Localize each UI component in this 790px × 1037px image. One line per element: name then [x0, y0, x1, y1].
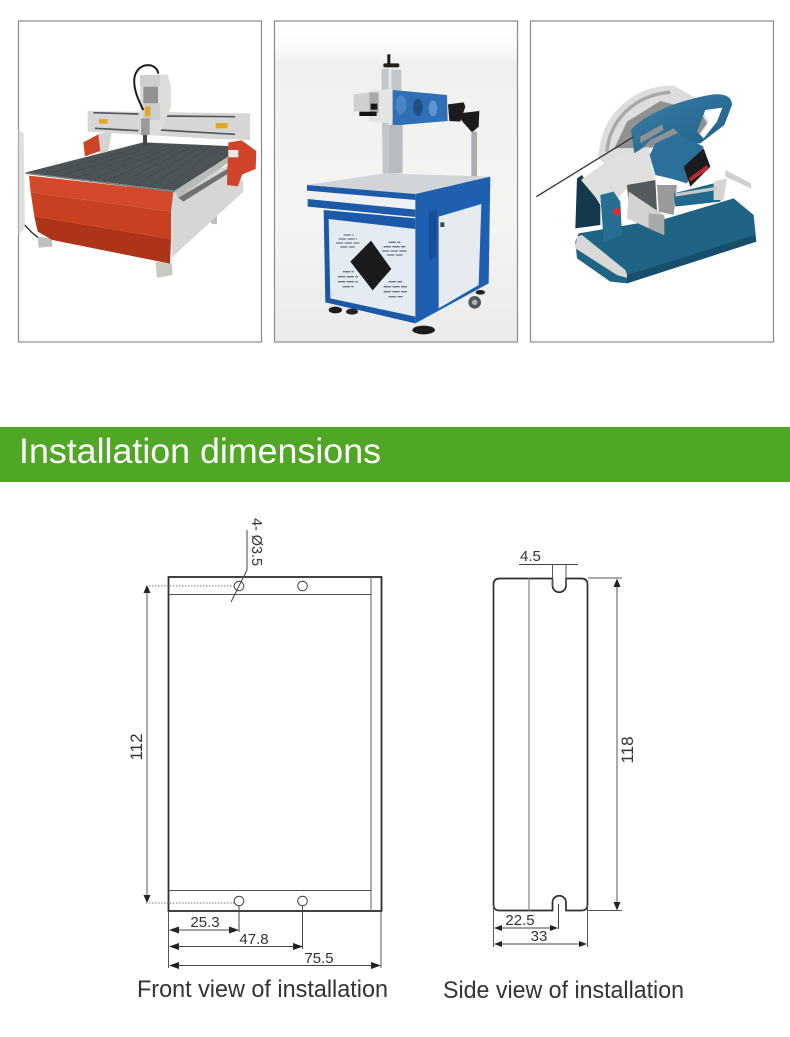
dimension 33 [494, 905, 588, 947]
diagram: front view of installation [127, 518, 388, 1003]
dimension 75.5: 75.5 [304, 950, 334, 967]
illustration: cut-off saw [536, 86, 756, 283]
dimension 112: 112 [127, 733, 146, 761]
panel: cut-off saw photo [530, 21, 774, 342]
dimension 75.5 [169, 911, 381, 969]
dimension 118 [588, 578, 637, 910]
body outline [168, 577, 382, 911]
mounting holes [234, 581, 307, 906]
diagram: side view of installation [443, 548, 684, 1004]
dimension 47.8: 47.8 [239, 931, 269, 948]
dimension 33: 33 [531, 928, 547, 945]
dimension 4.5: 4.5 [520, 548, 541, 565]
inner fold line [528, 578, 530, 911]
hole diameter leader: 4- Ø3.5 [248, 518, 264, 566]
dimension 22.5 [494, 904, 558, 947]
dimension 25.3: 25.3 [190, 914, 220, 931]
caption: front view: Front view of installation [137, 976, 388, 1003]
dimension 118: 118 [618, 736, 637, 764]
dimension 4.5 [519, 548, 578, 586]
dimension 25.3 [168, 906, 239, 968]
illustration: CNC router machine [19, 65, 256, 278]
panel: laser marking machine photo [274, 21, 518, 342]
dimension 47.8 [169, 906, 303, 950]
section banner: Installation dimensions [0, 427, 790, 482]
panel: CNC router photo [18, 21, 262, 342]
body outline with slots [494, 578, 588, 910]
dimension 112 [127, 585, 235, 903]
illustration: laser marking machine [307, 54, 490, 334]
hole diameter leader [231, 518, 264, 602]
heading text: Installation dimensions [19, 432, 381, 471]
caption: side view: Side view of installation [443, 977, 684, 1004]
dimension 22.5: 22.5 [505, 912, 535, 929]
